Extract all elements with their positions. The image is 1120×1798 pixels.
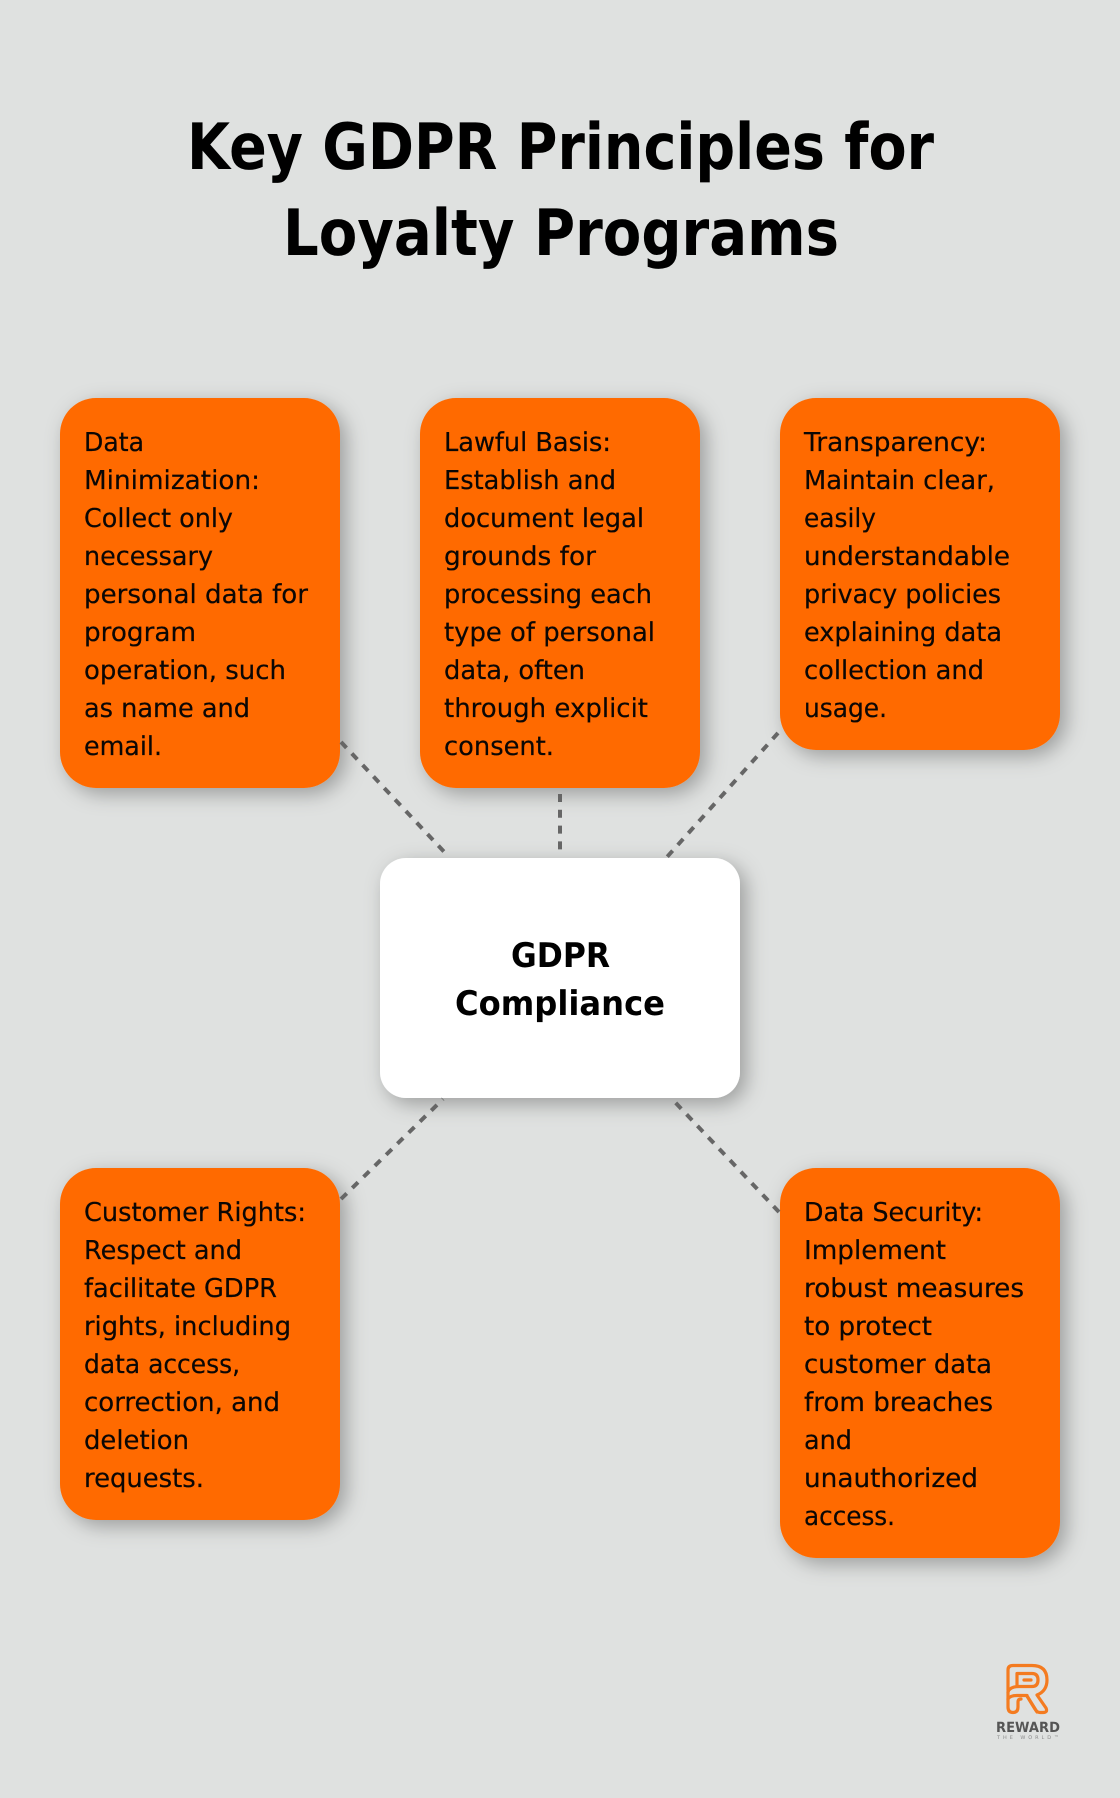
panel: data security [780, 1168, 1060, 1558]
panel: lawful basis: type of personal [444, 618, 655, 648]
panel: lawful basis: consent. [444, 732, 554, 762]
panel: data minimization [60, 398, 340, 788]
panel: data security: Implement [804, 1236, 946, 1266]
panel: lawful basis: processing each [444, 580, 652, 610]
panel: customer rights: facilitate GDPR [84, 1274, 277, 1304]
panel: center GDPR compliance [380, 858, 740, 1098]
panel: data security: robust measures [804, 1274, 1024, 1304]
title: Loyalty Programs [283, 197, 839, 271]
panel: customer rights: Respect and [84, 1236, 242, 1266]
panel: data minimization: Collect only [84, 504, 233, 534]
tagline: THE WORLD™ [996, 1735, 1059, 1741]
connector: data security to center [672, 1099, 779, 1212]
panel: customer rights: requests. [84, 1464, 204, 1494]
panel: customer rights [60, 1168, 340, 1520]
panel: customer rights: Customer Rights: [84, 1198, 306, 1228]
panel: customer rights: deletion [84, 1426, 189, 1456]
connector: customer rights to center [341, 1099, 443, 1199]
panel: data security: and [804, 1426, 852, 1456]
panel: transparency: privacy policies [804, 580, 1001, 610]
panel: data minimization: as name and [84, 694, 250, 724]
panel: lawful basis: through explicit [444, 694, 648, 724]
title [187, 111, 934, 271]
panel: lawful basis: data, often [444, 656, 585, 686]
panel: customer rights: data access, [84, 1350, 240, 1380]
panel: transparency: collection and [804, 656, 984, 686]
panel: data minimization: Data [84, 428, 144, 458]
panel: data security: to protect [804, 1312, 932, 1342]
panel: center GDPR compliance: Compliance [455, 984, 665, 1024]
panel: data security: customer data [804, 1350, 992, 1380]
panel: data security: Data Security: [804, 1198, 983, 1228]
panel: data minimization: program [84, 618, 196, 648]
icon: R mark [1008, 1666, 1047, 1712]
wordmark: REWARD [996, 1720, 1060, 1736]
panel: transparency: understandable [804, 542, 1010, 572]
panel: transparency: usage. [804, 694, 887, 724]
panel: data security: unauthorized [804, 1464, 978, 1494]
logo: Reward the World [996, 1666, 1060, 1741]
connector: transparency to center [667, 733, 778, 857]
connector: lawful basis to center [558, 794, 562, 851]
panel: center GDPR compliance: GDPR [511, 936, 610, 976]
panel: data security: from breaches [804, 1388, 993, 1418]
panel: data minimization: necessary [84, 542, 213, 572]
panel: data minimization: operation, such [84, 656, 286, 686]
panel: data minimization: Minimization: [84, 466, 260, 496]
panel: lawful basis: Establish and [444, 466, 616, 496]
panel: transparency: easily [804, 504, 876, 534]
panel: lawful basis: document legal [444, 504, 644, 534]
panel: lawful basis: grounds for [444, 542, 596, 572]
connector: data minimization to center [341, 742, 449, 857]
panel: data security: access. [804, 1502, 895, 1532]
panel: customer rights: correction, and [84, 1388, 280, 1418]
panel: transparency: Transparency: [803, 428, 987, 458]
panel: transparency [780, 398, 1060, 750]
panel: data minimization: personal data for [84, 580, 308, 610]
panel: customer rights: rights, including [84, 1312, 291, 1342]
panel: transparency: Maintain clear, [804, 466, 995, 496]
panel: lawful basis [420, 398, 700, 788]
panel: data minimization: email. [84, 732, 162, 762]
panel: lawful basis: Lawful Basis: [444, 428, 611, 458]
title: Key GDPR Principles for [187, 111, 934, 185]
panel: transparency: explaining data [804, 618, 1002, 648]
